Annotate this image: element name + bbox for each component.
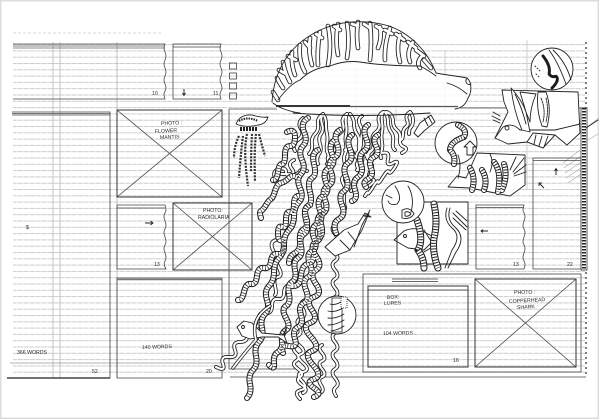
panel: left main text box, 366 words: 366 WORDS bbox=[17, 350, 48, 356]
ruled grid background bbox=[13, 33, 585, 378]
jellyfish: tentacles, beaded and ribbon bbox=[216, 112, 430, 399]
panel: right text box 22 bbox=[533, 158, 581, 269]
photo placeholder: copperhead shark: SHARK bbox=[517, 304, 535, 311]
panel: small text box 13: 13 bbox=[154, 262, 160, 268]
icon: four checkbox squares bbox=[230, 63, 236, 99]
fish: small fish near float edge bbox=[414, 115, 435, 137]
panel: right text box 13: 13 bbox=[513, 262, 519, 268]
panel: top narrow text box: 11 bbox=[213, 91, 218, 97]
panel: top narrow text box bbox=[173, 44, 222, 99]
panel: photo placeholder, radiolaria: PHOTO: bbox=[203, 208, 223, 214]
jellyfish: float bladder with crest bbox=[271, 22, 471, 113]
panel: photo placeholder, radiolaria bbox=[173, 203, 252, 270]
box: lures text: LURES bbox=[384, 300, 402, 307]
frame line around jellyfish column bbox=[229, 108, 581, 369]
photo placeholder: copperhead shark: PHOTO : bbox=[514, 290, 535, 296]
beaded chains over fish bbox=[470, 162, 506, 192]
panel: box lures with copperhead shark photo bbox=[363, 274, 581, 372]
panel: small text box 13 bbox=[117, 205, 166, 269]
heading rule of lures box bbox=[392, 279, 438, 282]
photo placeholder: copperhead shark bbox=[475, 279, 576, 367]
illustration: magnifier circle with tentacle and up arrow bbox=[435, 122, 477, 164]
crest tubes bbox=[273, 22, 431, 100]
box: lures text: 104 WORDS . bbox=[383, 330, 416, 337]
magnifier circle: polyps bbox=[531, 48, 573, 90]
box: lures text: BOX: bbox=[387, 294, 399, 301]
illustration: magnifier circle with fish panel bbox=[382, 181, 468, 268]
panel: right text box 22: 22 bbox=[567, 262, 573, 268]
box: lures text: 16 bbox=[453, 358, 459, 364]
panel: top wide text box bbox=[13, 44, 166, 99]
panel: right text box 13 bbox=[476, 205, 525, 269]
panel: photo placeholder, flower mantis: FLOWER bbox=[155, 128, 178, 135]
panel: left main text box, 366 words: $ bbox=[26, 225, 29, 231]
beaded chains over panel fish bbox=[417, 204, 438, 268]
panel: text box, 140 words bbox=[117, 278, 222, 378]
illustration: fish among lower tentacles bbox=[233, 306, 287, 368]
bottom page line bbox=[230, 376, 586, 378]
hanging figures bbox=[511, 88, 549, 132]
panel behind fish bbox=[495, 90, 580, 148]
panel: left main text box, 366 words bbox=[7, 112, 277, 378]
box: lures text bbox=[368, 286, 468, 367]
panel: text box, 140 words: 20 bbox=[206, 369, 212, 375]
photo placeholder: copperhead shark: COPPERHEAD bbox=[509, 297, 546, 305]
panel: photo placeholder, radiolaria: RADIOLARIA bbox=[198, 215, 230, 221]
panel: photo placeholder, flower mantis: PHOTO : bbox=[161, 120, 182, 127]
illustration: fish cluster with magnifier bbox=[492, 48, 598, 148]
panel: top wide text box: 10 bbox=[152, 91, 158, 97]
illustration: fish with fan tail bbox=[448, 153, 526, 196]
panel: photo placeholder, flower mantis: MANTIS bbox=[160, 134, 180, 141]
panel: text box, 140 words: 140 WORDS bbox=[142, 344, 173, 351]
panel: left main text box, 366 words: 52 bbox=[92, 369, 98, 375]
right page edge ticks and hatching bbox=[563, 42, 599, 377]
illustration: fish with tail near tentacles bbox=[325, 210, 371, 256]
icon: small jellyfish thumbnail bbox=[234, 115, 268, 186]
illustration: magnifier circle with coiled tentacle bbox=[318, 296, 356, 334]
panel: photo placeholder, flower mantis bbox=[117, 110, 222, 197]
